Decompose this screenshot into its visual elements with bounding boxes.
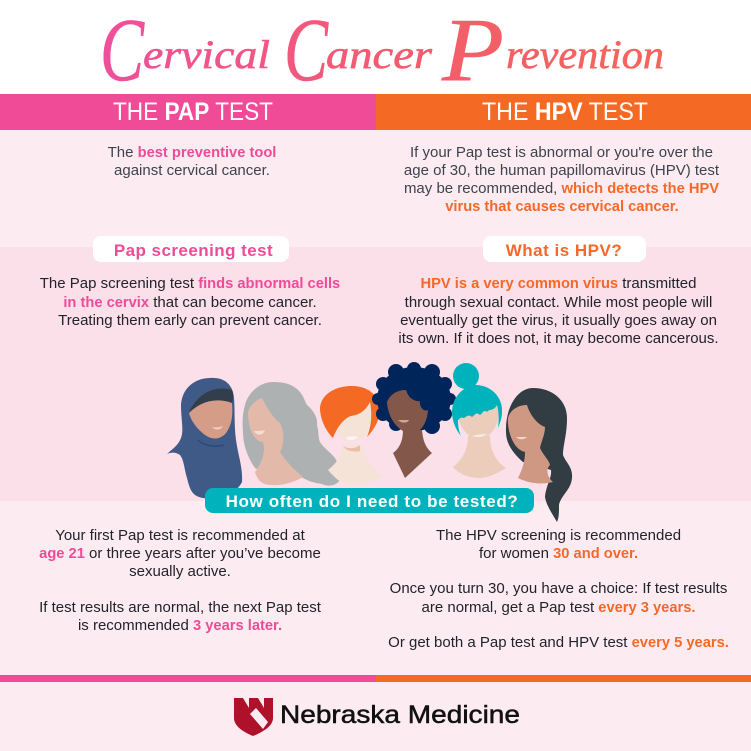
header: the Pap test: THE PAP TEST	[113, 98, 273, 126]
title: ervical	[143, 32, 270, 77]
woman with teal hair	[452, 363, 506, 478]
title	[100, 1, 664, 100]
pill heading: how often do I need to be tested: How often do I need to be tested?	[226, 492, 518, 511]
footer stripe	[0, 675, 751, 682]
pill heading: Pap screening test	[93, 236, 289, 262]
text: Pap test frequency: Your first Pap test is recommended at	[55, 527, 306, 544]
text: best preventive tool	[108, 144, 276, 179]
pill heading: What is HPV?	[483, 236, 646, 262]
text: HPV test frequency: are normal, get a Pap test every 3 years.	[422, 599, 695, 616]
title: C	[284, 1, 329, 100]
text: Pap test frequency: age 21 or three years after you’ve become	[39, 545, 321, 562]
text: HPV test frequency: for women 30 and over.	[479, 545, 638, 562]
text: HPV test frequency: The HPV screening is recommended	[436, 527, 681, 544]
pill heading: What is HPV?: What is HPV?	[506, 241, 622, 260]
text: HPV test frequency: Or get both a Pap test and HPV test every 5 years.	[388, 634, 729, 651]
text: Pap screening description: The Pap screening test finds abnormal cells	[40, 275, 340, 292]
text: Pap test frequency: is recommended 3 years later.	[78, 617, 282, 634]
text: what is HPV description	[398, 275, 719, 347]
header: the HPV test	[376, 94, 751, 130]
title: ancer	[326, 32, 433, 77]
logo: Nebraska Medicine: Nebraska Medicine	[280, 701, 520, 729]
text: HPV test intro: virus that causes cervical cancer.	[445, 199, 679, 215]
text: Pap test frequency: sexually active.	[129, 563, 231, 580]
text: HPV test frequency: Once you turn 30, you have a choice: If test results	[390, 580, 727, 597]
header: the Pap test	[0, 94, 376, 130]
text: what is HPV description: its own. If it does not, it may become cancerous.	[398, 330, 719, 347]
text: HPV test intro: If your Pap test is abnormal or you're over the	[410, 144, 713, 161]
text: what is HPV description: HPV is a very common virus transmitted	[421, 275, 696, 292]
text: what is HPV description: through sexual contact. While most people will	[405, 294, 712, 311]
woman with dark curly hair	[372, 362, 456, 478]
text: Pap screening description: Treating them early can prevent cancer.	[58, 312, 322, 329]
woman with red hair	[320, 386, 382, 485]
text: best preventive tool: The best preventive tool	[108, 144, 276, 161]
title: C	[100, 1, 145, 100]
text: HPV test intro	[404, 144, 720, 215]
woman with grey hair	[243, 382, 341, 486]
text: HPV test intro: age of 30, the human papillomavirus (HPV) test	[404, 162, 720, 179]
text: Pap screening description: in the cervix that can become cancer.	[63, 294, 317, 311]
icon: shield	[234, 698, 273, 736]
pill heading: Pap screening test: Pap screening test	[114, 241, 273, 260]
text: best preventive tool: against cervical cancer.	[114, 162, 270, 179]
woman in hijab	[167, 378, 242, 498]
text: Pap test frequency	[39, 527, 322, 634]
pill heading: how often do I need to be tested	[205, 488, 534, 513]
illustration: group of women	[167, 362, 572, 522]
woman with long dark hair	[506, 388, 572, 522]
text: Pap test frequency: If test results are normal, the next Pap test	[39, 599, 322, 616]
title: revention	[506, 32, 664, 77]
text: HPV test frequency	[388, 527, 729, 651]
title: P	[441, 1, 504, 100]
text: what is HPV description: eventually get the virus, it usually goes away on	[400, 312, 717, 329]
logo: Nebraska Medicine	[234, 698, 520, 736]
text: HPV test intro: may be recommended, which detects the HPV	[404, 180, 719, 197]
header: the HPV test: THE HPV TEST	[482, 98, 648, 126]
text: Pap screening description	[40, 275, 340, 329]
